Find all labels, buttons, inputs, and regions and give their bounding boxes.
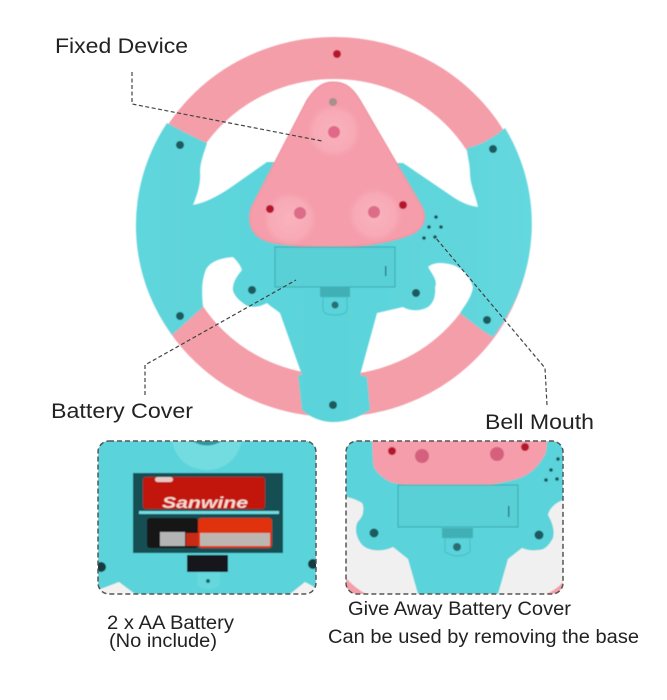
screws on wheel bbox=[176, 50, 497, 409]
cup centres and screws bbox=[328, 126, 340, 138]
pink rim corners bbox=[346, 578, 366, 594]
leader line: fixed device bbox=[132, 72, 322, 141]
panel: battery cover detail bbox=[346, 441, 563, 594]
leader line: bell mouth bbox=[435, 237, 547, 405]
blurred battery brand: Sanwine bbox=[162, 495, 248, 512]
caption: give away battery cover: Give Away Battery Cover bbox=[348, 599, 572, 620]
pink wheel rim bbox=[158, 58, 510, 396]
caption: 2 x AA battery: 2 x AA Battery bbox=[107, 613, 235, 634]
pink hub bbox=[372, 441, 547, 487]
lower tab bbox=[197, 572, 220, 590]
cover bbox=[398, 485, 518, 527]
white corners bbox=[98, 582, 135, 594]
red battery bbox=[143, 477, 265, 509]
suction cups bbox=[307, 104, 361, 158]
screw holes bbox=[96, 562, 106, 572]
black tab bbox=[187, 555, 228, 572]
black and red battery bbox=[147, 518, 198, 548]
leader line: battery cover bbox=[145, 280, 296, 395]
infographic canvas bbox=[52, 36, 638, 651]
compartment bbox=[133, 473, 283, 553]
caption: removal note: Can be used by removing the base bbox=[328, 627, 639, 648]
steering wheel bbox=[136, 50, 532, 422]
label: bell mouth: Bell Mouth bbox=[485, 410, 594, 434]
pink triangle hub bbox=[250, 82, 424, 247]
panel: battery compartment bbox=[96, 441, 318, 594]
side screws bbox=[370, 528, 378, 538]
bell mouth holes bbox=[422, 215, 443, 240]
teal body bbox=[346, 441, 563, 594]
teal wheel body bbox=[136, 123, 532, 422]
label: battery cover: Battery Cover bbox=[51, 399, 193, 423]
speaker holes bbox=[556, 457, 560, 461]
top arc of panel bbox=[172, 441, 242, 470]
caption: no include: (No include) bbox=[109, 631, 217, 652]
label: fixed device: Fixed Device bbox=[55, 34, 188, 58]
battery cover bbox=[275, 247, 395, 315]
